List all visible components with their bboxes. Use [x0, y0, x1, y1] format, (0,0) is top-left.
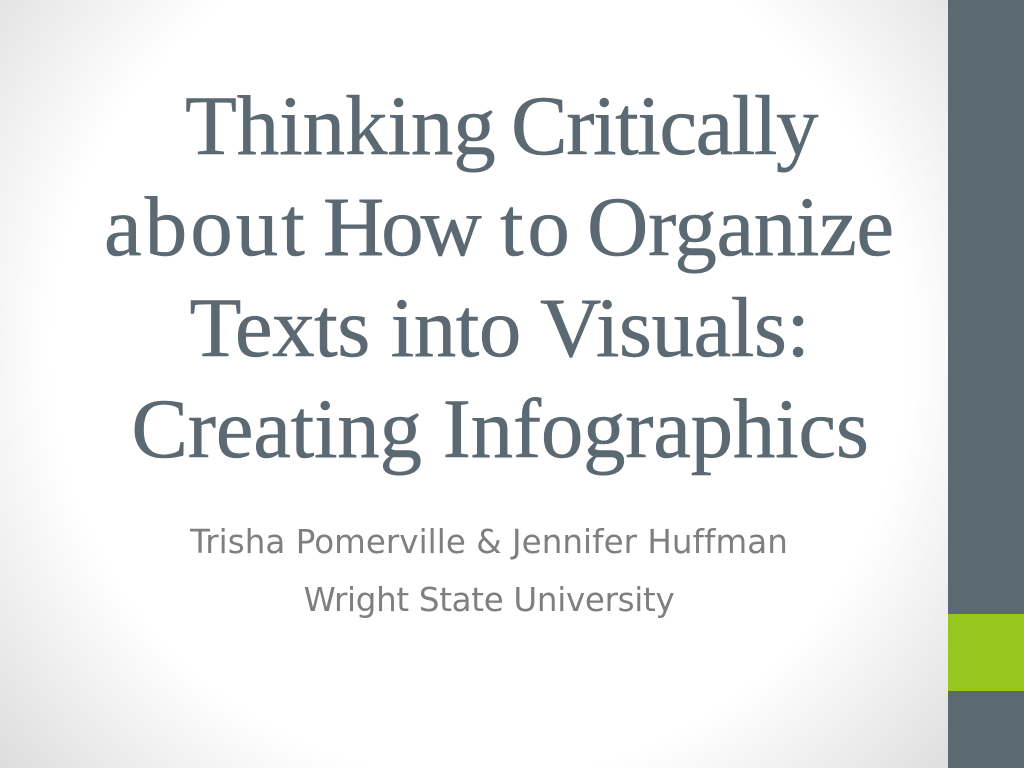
title: Texts into Visuals:: [189, 281, 810, 375]
subtitle: authors and university: Trisha Pomerville & Jennifer Huffman: [190, 523, 788, 561]
title: to: [500, 180, 574, 274]
title: Organize: [587, 180, 894, 274]
subtitle: authors and university: Wright State University: [304, 581, 674, 619]
green accent block: [948, 614, 1024, 691]
title: Creating Infographics: [131, 382, 869, 476]
title: Thinking: [185, 79, 496, 173]
side bar: [948, 0, 1024, 768]
title: How: [323, 180, 479, 274]
subtitle: authors and university: [190, 523, 788, 619]
title: [104, 79, 894, 476]
title: Critically: [511, 79, 817, 173]
title: about: [104, 180, 308, 274]
